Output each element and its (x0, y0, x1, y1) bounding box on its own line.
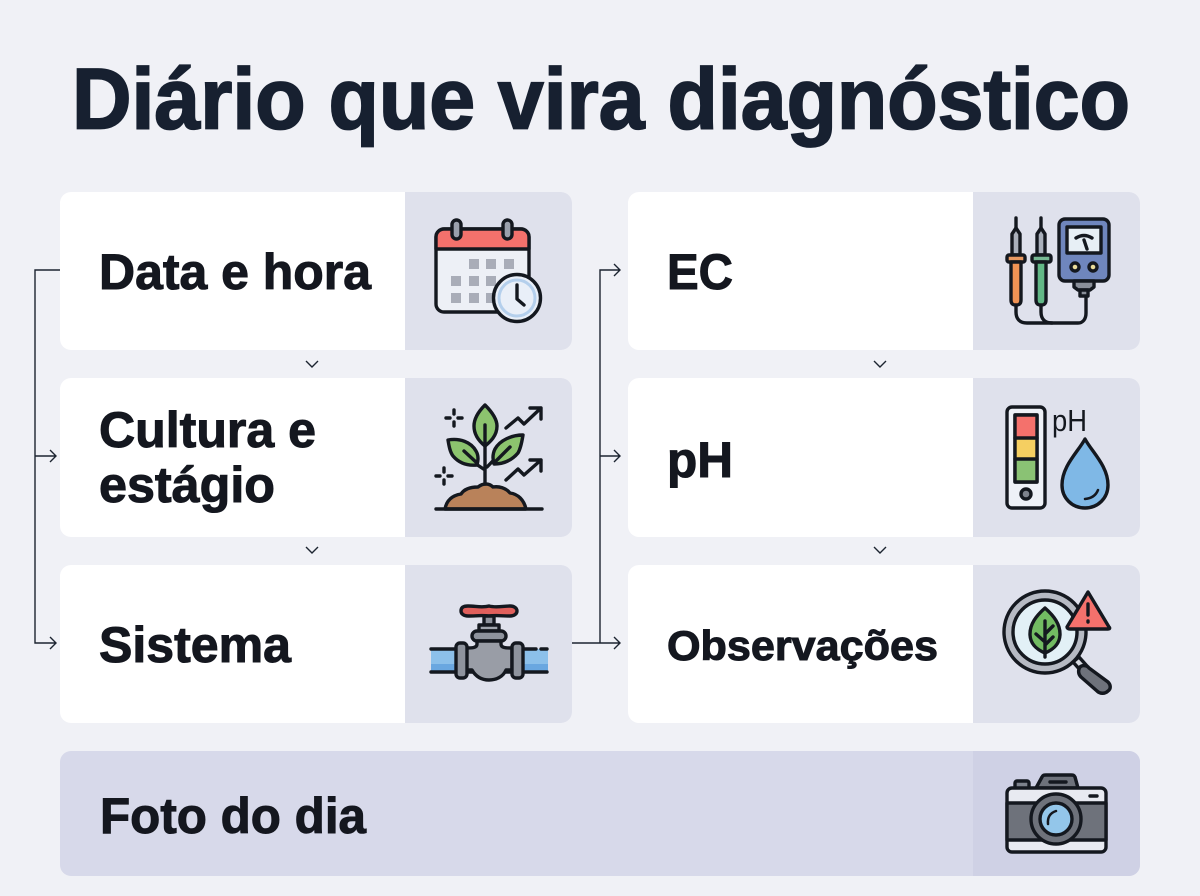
panel: Observações (628, 565, 1140, 723)
icon: pipe valve (431, 606, 548, 680)
title: Diário que vira diagnóstico (72, 52, 1130, 148)
panel: Foto do dia (60, 751, 1140, 876)
arrow: down (306, 361, 318, 367)
icon: calendar with clock (436, 220, 540, 322)
panel: Data e hora (60, 192, 572, 350)
arrow: down (874, 547, 886, 553)
icon: growing plant (436, 405, 542, 509)
icon: pH strip and water drop (1007, 403, 1108, 508)
label: pH: pH (667, 432, 733, 488)
panel: Cultura e estágio (60, 378, 572, 537)
arrow: down (306, 547, 318, 553)
label: Cultura e estágio: Cultura e (99, 402, 316, 458)
icon: camera (1007, 775, 1106, 852)
label: Data e hora: Data e hora (99, 244, 372, 300)
panel: EC (628, 192, 1140, 350)
label: Observações: Observações (667, 622, 938, 669)
icon: EC meter with probes (1007, 218, 1109, 323)
connector: left column flow (35, 270, 60, 649)
arrow: down (874, 361, 886, 367)
icon: magnifier, leaf and warning (1004, 591, 1110, 693)
label: EC: EC (667, 244, 733, 300)
panel: Sistema (60, 565, 572, 723)
panel: pH (628, 378, 1140, 537)
label: pH on icon: pH (1052, 403, 1087, 438)
label: Foto do dia: Foto do dia (100, 788, 367, 844)
label: Cultura e estágio: estágio (99, 457, 275, 513)
connector: bridge to right column (572, 264, 620, 649)
label: Sistema: Sistema (99, 617, 292, 673)
